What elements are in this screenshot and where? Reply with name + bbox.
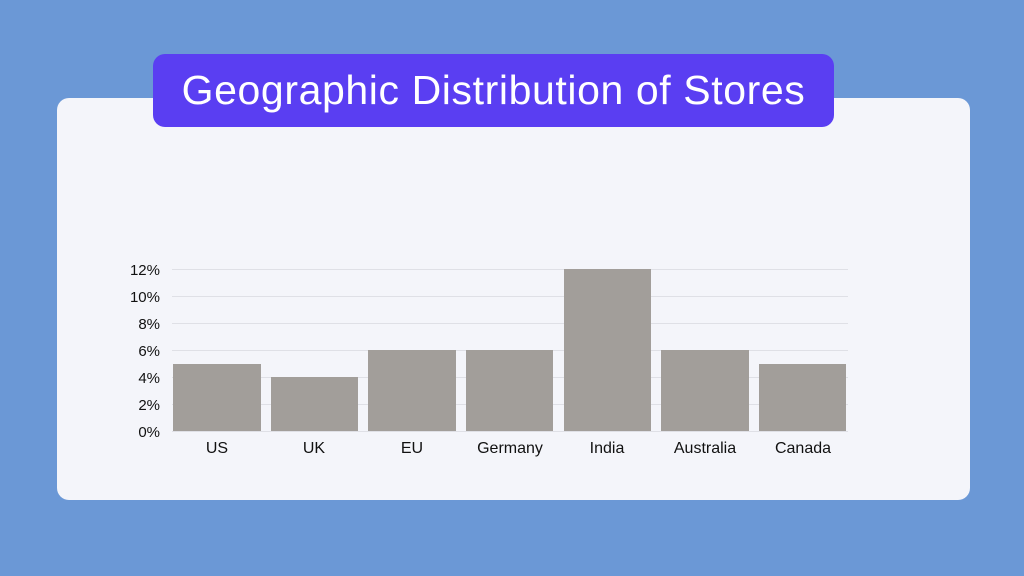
x axis labels: India [590, 440, 624, 457]
y axis labels: 0% [138, 424, 160, 441]
x axis labels: EU [401, 440, 423, 457]
x axis labels: Canada [775, 440, 831, 457]
y axis labels: 6% [138, 343, 160, 360]
y axis labels: 4% [138, 370, 160, 387]
x axis labels [206, 440, 831, 457]
title: Geographic Distribution of Stores [182, 67, 805, 113]
y axis labels: 8% [138, 316, 160, 333]
y axis labels [130, 262, 160, 441]
y axis labels: 2% [138, 397, 160, 414]
x axis labels: US [206, 440, 228, 457]
y axis labels: 10% [130, 289, 160, 306]
bars [173, 269, 846, 431]
x axis labels: UK [303, 440, 325, 457]
panel: chart card [57, 98, 970, 500]
x axis labels: Australia [674, 440, 736, 457]
title [153, 54, 834, 127]
x axis labels: Germany [477, 440, 543, 457]
y axis labels: 12% [130, 262, 160, 279]
